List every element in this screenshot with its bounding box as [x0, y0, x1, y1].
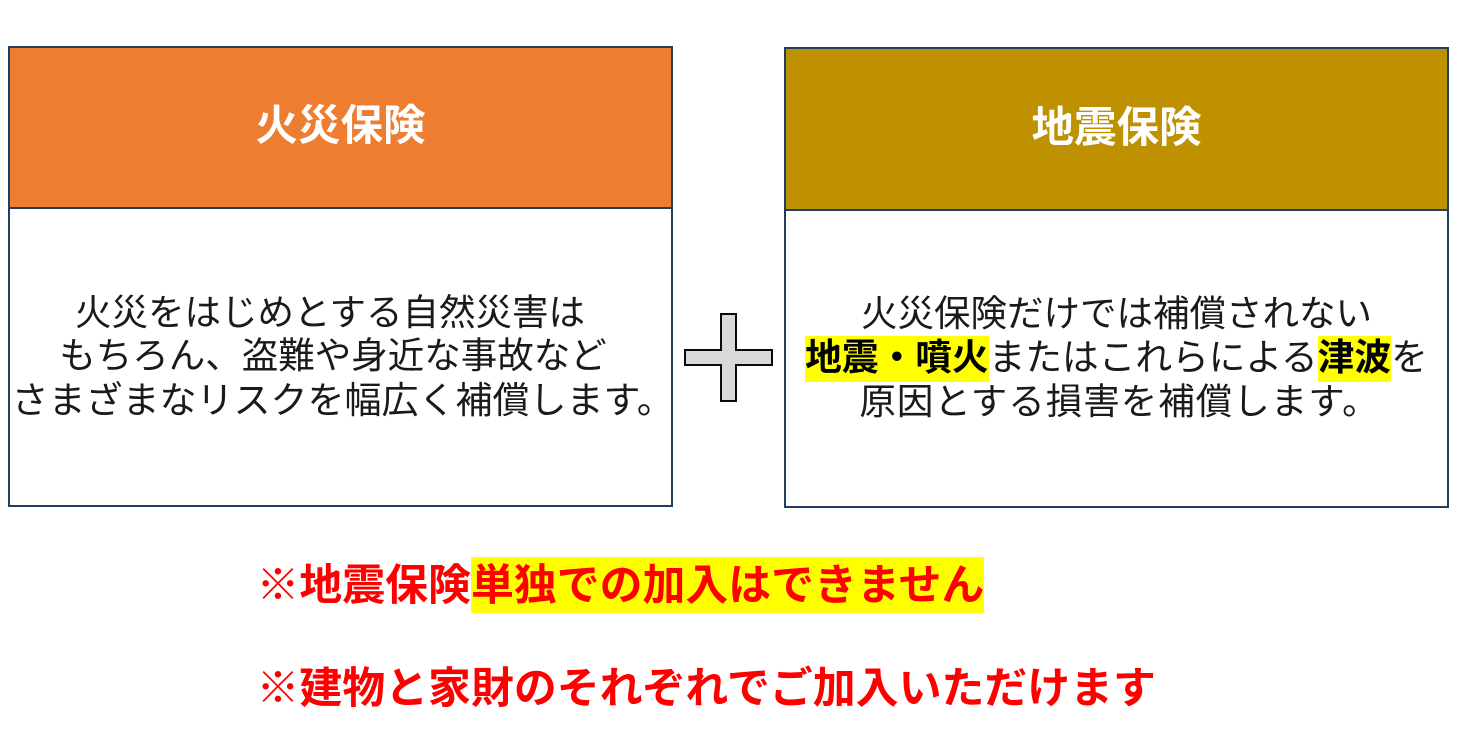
text block: earthquake insurance description: [805, 293, 1428, 422]
panel: earthquake insurance: [784, 47, 1449, 508]
heading: fire insurance: [10, 48, 671, 209]
text block: earthquake insurance description: 原因とする損害を補償します。: [859, 381, 1380, 422]
text block: fire insurance description: 火災をはじめとする自然災害は: [75, 292, 585, 333]
text block: fire insurance description: もちろん、盗難や身近な事故など: [59, 335, 607, 376]
heading: fire insurance: 火災保険: [255, 103, 426, 150]
heading: earthquake insurance: [786, 49, 1447, 211]
text block: fire insurance description: さまざまなリスクを幅広く補償します。: [12, 380, 674, 421]
heading: earthquake insurance: 地震保険: [1031, 105, 1202, 152]
note: cannot enroll in earthquake insurance alone: ※地震保険単独での加入はできません: [256, 562, 984, 610]
panel: fire insurance: [8, 46, 673, 507]
text block: earthquake insurance description: 火災保険だけでは補償されない: [861, 293, 1372, 334]
text block: earthquake insurance description: 地震・噴火またはこれらによる津波を: [805, 337, 1428, 378]
note: building and contents: ※建物と家財のそれぞれでご加入いただけます: [256, 665, 1156, 713]
text block: fire insurance description: [12, 292, 674, 421]
icon: plus sign: [684, 313, 773, 402]
